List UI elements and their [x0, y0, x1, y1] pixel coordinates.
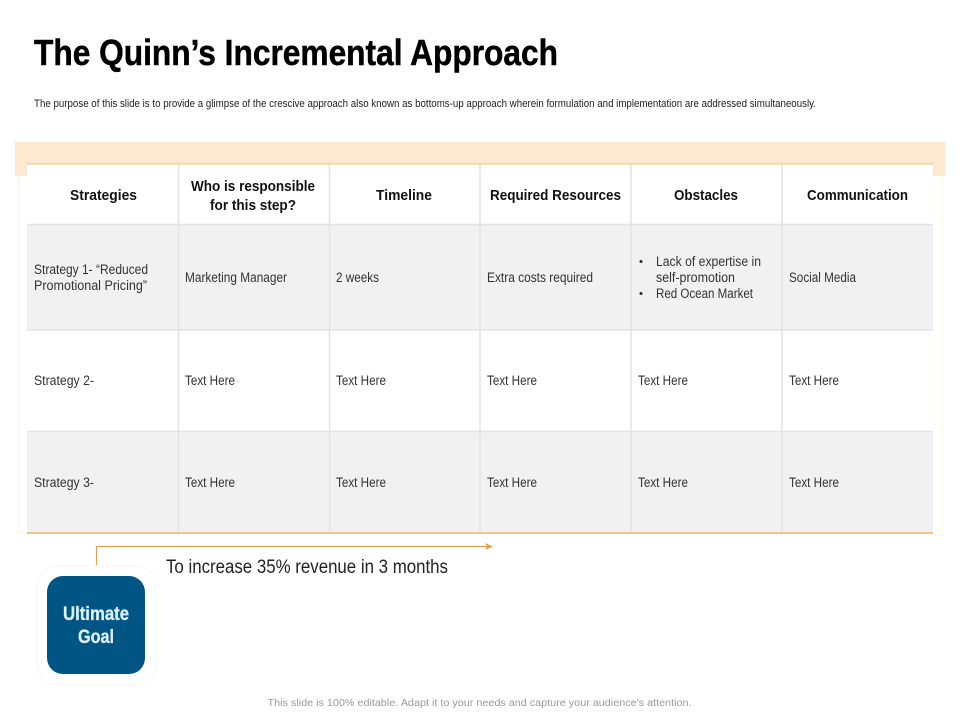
table row: strategy 1: 2 weeks — [336, 270, 379, 285]
table header row: Communication — [807, 187, 908, 204]
table row: strategy 1: Marketing Manager — [185, 270, 287, 285]
title: The Quinn’s Incremental Approach — [34, 32, 558, 73]
table header row: Who is responsible — [191, 178, 315, 195]
table row: strategy 1: Red Ocean Market — [656, 286, 753, 301]
table row: strategy 2 — [34, 373, 839, 388]
table row: strategy 3: Text Here — [336, 475, 386, 490]
table row: strategy 2: Text Here — [789, 373, 839, 388]
table header row — [70, 178, 908, 214]
table row: strategy 1: self-promotion — [656, 270, 735, 285]
table header row: Required Resources — [490, 187, 621, 204]
table header row: for this step? — [210, 197, 296, 214]
table row: strategy 3: Strategy 3- — [34, 475, 94, 490]
table row: strategy 2: Text Here — [336, 373, 386, 388]
table row: strategy 1: Social Media — [789, 270, 856, 285]
table row: strategy 1: Extra costs required — [487, 270, 593, 285]
table header row: Strategies — [70, 187, 137, 204]
table row: strategy 2: Text Here — [638, 373, 688, 388]
icon: ultimate goal badge — [37, 566, 156, 685]
arrow: goal to target — [96, 543, 493, 565]
table row: strategy 3: Text Here — [638, 475, 688, 490]
panel: table frame — [15, 142, 945, 532]
table row: strategy 1: Promotional Pricing” — [34, 278, 147, 293]
table row: strategy 3: Text Here — [487, 475, 537, 490]
subtitle: The purpose of this slide is to provide a glimpse of the crescive approach also known as bottoms-up approach wherein formulation and implementation are addressed simultaneously. — [34, 98, 816, 110]
row backgrounds — [27, 164, 933, 533]
table header row: Obstacles — [674, 187, 738, 204]
table row: strategy 1: Lack of expertise in — [656, 254, 761, 269]
goal statement: To increase 35% revenue in 3 months — [166, 557, 448, 578]
table row: strategy 1 — [34, 254, 856, 301]
table row: strategy 3: Text Here — [789, 475, 839, 490]
table row: strategy 3 — [34, 475, 839, 490]
table row: strategy 3: Text Here — [185, 475, 235, 490]
table row: strategy 2: Text Here — [185, 373, 235, 388]
icon: ultimate goal badge: Goal — [78, 627, 114, 648]
footer note: This slide is 100% editable. Adapt it to your needs and capture your audience's attention. — [268, 697, 692, 709]
table header row: Timeline — [376, 187, 432, 204]
table row: strategy 2: Strategy 2- — [34, 373, 94, 388]
table — [27, 164, 933, 533]
table row: strategy 1: Strategy 1- “Reduced — [34, 262, 148, 277]
table row: strategy 2: Text Here — [487, 373, 537, 388]
icon: ultimate goal badge: Ultimate — [63, 604, 129, 625]
